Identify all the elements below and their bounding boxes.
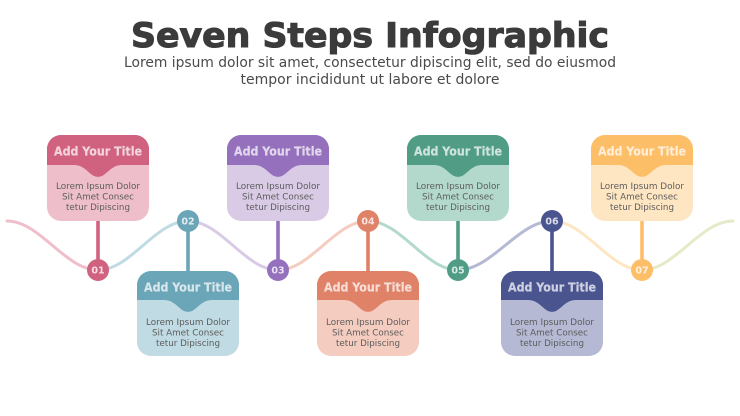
step 04: 04 xyxy=(361,216,375,228)
step 01: Lorem Ipsum Dolor xyxy=(56,181,141,191)
step 05: Add Your Title xyxy=(414,144,502,158)
step 07: Sit Amet Consec xyxy=(606,192,678,202)
step 04: tetur Dipiscing xyxy=(336,338,400,348)
step 06: Sit Amet Consec xyxy=(516,328,588,338)
step 03 xyxy=(227,135,329,281)
step 06: tetur Dipiscing xyxy=(520,338,584,348)
subtitle: tempor incididunt ut labore et dolore xyxy=(240,72,500,88)
step 03: Add Your Title xyxy=(234,144,322,158)
title: Seven Steps Infographic xyxy=(131,16,609,56)
step 05: Sit Amet Consec xyxy=(422,192,494,202)
step 06 xyxy=(501,210,603,356)
step 05: tetur Dipiscing xyxy=(426,202,490,212)
step 07 xyxy=(591,135,693,281)
step 03: Lorem Ipsum Dolor xyxy=(236,181,321,191)
step 04: Lorem Ipsum Dolor xyxy=(326,317,411,327)
step 06: 06 xyxy=(545,216,559,228)
step 03: Sit Amet Consec xyxy=(242,192,314,202)
step 03: 03 xyxy=(271,266,285,276)
step 01: tetur Dipiscing xyxy=(66,202,130,212)
step 03: tetur Dipiscing xyxy=(246,202,310,212)
subtitle xyxy=(124,55,616,88)
step 02: Sit Amet Consec xyxy=(152,328,224,338)
step 07: 07 xyxy=(635,266,649,276)
step 01 xyxy=(47,135,149,281)
step 02: 02 xyxy=(181,216,195,228)
step 04: Add Your Title xyxy=(324,280,412,294)
step 02: tetur Dipiscing xyxy=(156,338,220,348)
step 02: Add Your Title xyxy=(144,280,232,294)
step 07: Add Your Title xyxy=(598,144,686,158)
subtitle: Lorem ipsum dolor sit amet, consectetur dipiscing elit, sed do eiusmod xyxy=(124,55,616,71)
step 01: 01 xyxy=(91,266,105,276)
step 04 xyxy=(317,210,419,356)
step 05: 05 xyxy=(451,266,465,276)
step 04: Sit Amet Consec xyxy=(332,328,404,338)
step 01: Sit Amet Consec xyxy=(62,192,134,202)
step 05: Lorem Ipsum Dolor xyxy=(416,181,501,191)
step 02 xyxy=(137,210,239,356)
step 06: Add Your Title xyxy=(508,280,596,294)
step 05 xyxy=(407,135,509,281)
step 06: Lorem Ipsum Dolor xyxy=(510,317,595,327)
step 01: Add Your Title xyxy=(54,144,142,158)
step 07: tetur Dipiscing xyxy=(610,202,674,212)
wavy timeline xyxy=(7,221,733,270)
step 02: Lorem Ipsum Dolor xyxy=(146,317,231,327)
step 07: Lorem Ipsum Dolor xyxy=(600,181,685,191)
